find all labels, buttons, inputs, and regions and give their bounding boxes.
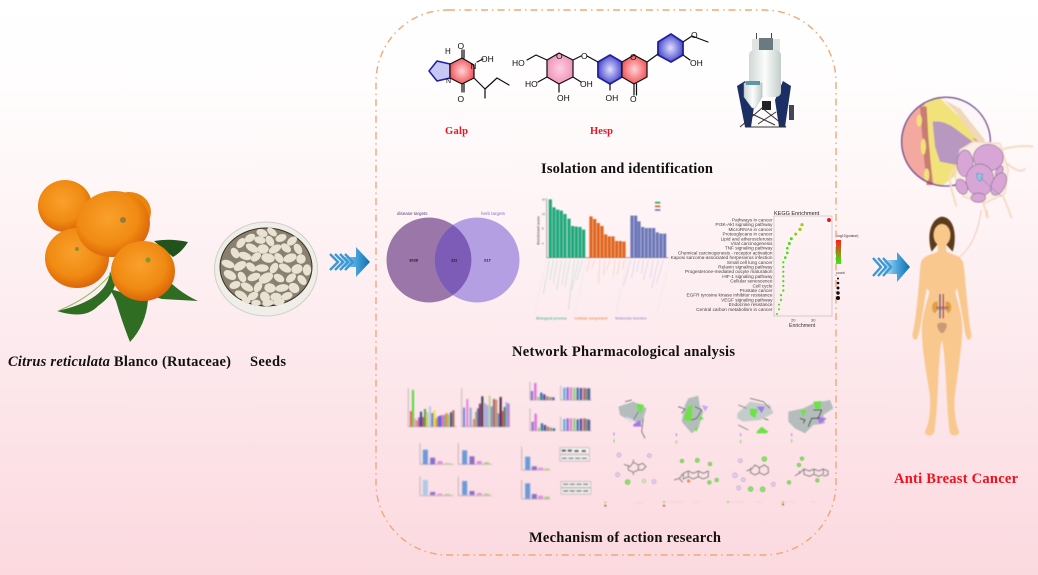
dot plot: KEGG enrichment: VEGF signaling pathway — [721, 297, 773, 302]
Venn diagram: 217 — [484, 258, 491, 262]
hair — [929, 217, 955, 252]
illustration: breast anatomy — [902, 97, 1033, 218]
dot plot: KEGG enrichment — [671, 211, 858, 329]
bar chart: GO enrichment: 16 — [542, 197, 545, 201]
dot plot: KEGG enrichment: Pathways in cancer — [732, 218, 773, 222]
Venn diagram: disease targets — [397, 211, 428, 216]
structure: Galp molecule: OH — [481, 54, 494, 64]
label: Galp: Galp — [445, 126, 468, 137]
docking 3D pose 4 — [788, 400, 833, 433]
conclusion label: Anti Breast Cancer — [894, 471, 1019, 487]
Venn diagram: 1028 — [409, 258, 419, 262]
bar chart: GO enrichment: Enrichment score — [536, 216, 540, 245]
dot plot: KEGG enrichment: Chemical carcinogenesis - receptor activation — [678, 250, 773, 255]
structure: Hesp molecule: O — [630, 52, 637, 62]
structure: Galp molecule: N — [470, 62, 476, 71]
bar chart: GO enrichment — [534, 197, 670, 320]
dot plot: KEGG enrichment: Small cell lung cancer — [727, 260, 773, 265]
dot plot: KEGG enrichment: Prostate cancer — [740, 288, 773, 293]
dot plot: KEGG enrichment: HIF-1 signaling pathway — [722, 274, 773, 279]
dot plot: KEGG enrichment: Cell cycle — [752, 283, 773, 288]
Venn diagram: 111 — [451, 258, 458, 262]
arrow: seeds to analysis — [330, 247, 370, 277]
bar chart: GO enrichment: Molecular function — [615, 316, 646, 320]
dot plot: KEGG enrichment: TNF signaling pathway — [725, 246, 773, 251]
body — [913, 242, 971, 436]
structure: Hesp molecule: OH — [580, 79, 593, 89]
dot plot: KEGG enrichment: EGFR tyrosine kinase inhibitor resistance — [687, 293, 773, 298]
arrow: analysis to outcome — [873, 252, 910, 282]
dot plot: KEGG enrichment: Lipid and atherosclerosis — [721, 236, 773, 241]
dashed rounded panel — [376, 10, 836, 555]
docking 3D pose 2 — [678, 396, 708, 433]
bar chart: multicolor panel A — [408, 388, 510, 427]
dot plot: KEGG enrichment: Kaposi sarcoma-associated herpesvirus infection — [671, 255, 773, 260]
chart panels: mechanism of action — [408, 382, 592, 499]
structure: Galp molecule: H — [445, 47, 451, 56]
dot plot: KEGG enrichment: Proteoglycans in cancer — [722, 232, 773, 237]
dot plot: KEGG enrichment: Viral carcinogenesis — [731, 241, 773, 246]
dot plot: KEGG enrichment: MicroRNAs in cancer — [728, 227, 773, 232]
callout line to anatomy — [945, 210, 987, 265]
face — [934, 224, 950, 246]
dot plot: KEGG enrichment: count — [836, 271, 845, 275]
structure: Hesp molecule — [512, 30, 708, 104]
dot plot: KEGG enrichment: -log10(pvalue) — [836, 234, 858, 238]
organs — [932, 294, 951, 333]
structure: Hesp molecule: O — [691, 30, 698, 40]
dot plot: KEGG enrichment: PI3K-Akt signaling pathway — [715, 222, 773, 227]
caption: source plant: Citrus reticulata Blanco (Rutaceae) — [8, 354, 231, 370]
structure: Hesp molecule: OH — [690, 58, 703, 68]
structure: Hesp molecule: OH — [557, 93, 570, 103]
image: NMR spectrometer — [737, 33, 794, 127]
2D ligand interaction diagrams — [624, 460, 828, 482]
Venn diagram — [386, 211, 520, 302]
heading: network pharmacology: Network Pharmacological analysis — [512, 344, 735, 360]
western blot panels — [560, 448, 591, 494]
photo: bowl of seeds — [214, 222, 318, 316]
structure: Hesp molecule: HO — [525, 79, 538, 89]
dot plot: KEGG enrichment: 20 — [791, 318, 796, 322]
structure: Hesp molecule: OH — [606, 93, 618, 103]
label: Hesp: Hesp — [590, 126, 613, 137]
docking 3D pose 1 — [618, 400, 647, 438]
ligand legends — [604, 502, 817, 506]
structure: Galp molecule: O — [458, 94, 464, 104]
dot plot: KEGG enrichment: Cellular senescence — [730, 279, 773, 284]
photo: mandarin oranges with leaves — [38, 180, 198, 342]
small docking legends — [614, 433, 792, 444]
heading: isolation: Isolation and identification — [541, 161, 713, 177]
structure: Hesp molecule: O — [556, 51, 563, 61]
dot plot: KEGG enrichment: Relaxin signaling pathway — [718, 264, 773, 270]
bar charts: lower left panels — [420, 443, 550, 499]
heading: mechanism: Mechanism of action research — [529, 530, 721, 546]
structure: Hesp molecule: HO — [512, 58, 525, 68]
bar chart: GO enrichment: 12 — [542, 212, 545, 216]
structure: Galp molecule: O — [458, 41, 464, 51]
docking 3D pose 3 — [737, 398, 773, 433]
bar chart: GO enrichment: Cellular component — [574, 316, 608, 320]
bar chart: GO enrichment: 8 — [542, 227, 544, 231]
structure: Galp molecule: N — [446, 78, 451, 85]
structure: Hesp molecule: O — [630, 94, 637, 104]
docking panels — [604, 396, 833, 506]
bar chart: GO enrichment: 4 — [542, 241, 544, 245]
dot plot: KEGG enrichment: Progesterone-mediated oocyte maturation — [685, 269, 773, 274]
Venn diagram: herb targets — [481, 211, 506, 216]
illustration: human figure — [913, 210, 987, 436]
structure: Hesp molecule: O — [581, 51, 588, 61]
dot plot: KEGG enrichment: Enrichment — [789, 323, 816, 329]
bar charts: upper right panels — [530, 382, 592, 431]
dot plot: KEGG enrichment: 30 — [811, 318, 816, 322]
dot plot: KEGG enrichment: KEGG Enrichment — [774, 211, 820, 217]
caption: seeds: Seeds — [250, 354, 286, 370]
dot plot: KEGG enrichment: Central carbon metabolism in cancer — [696, 307, 773, 312]
structure: Galp molecule — [429, 41, 509, 104]
dot plot: KEGG enrichment: Endocrine resistance — [729, 302, 773, 307]
bar chart: GO enrichment: Biological process — [536, 316, 567, 320]
